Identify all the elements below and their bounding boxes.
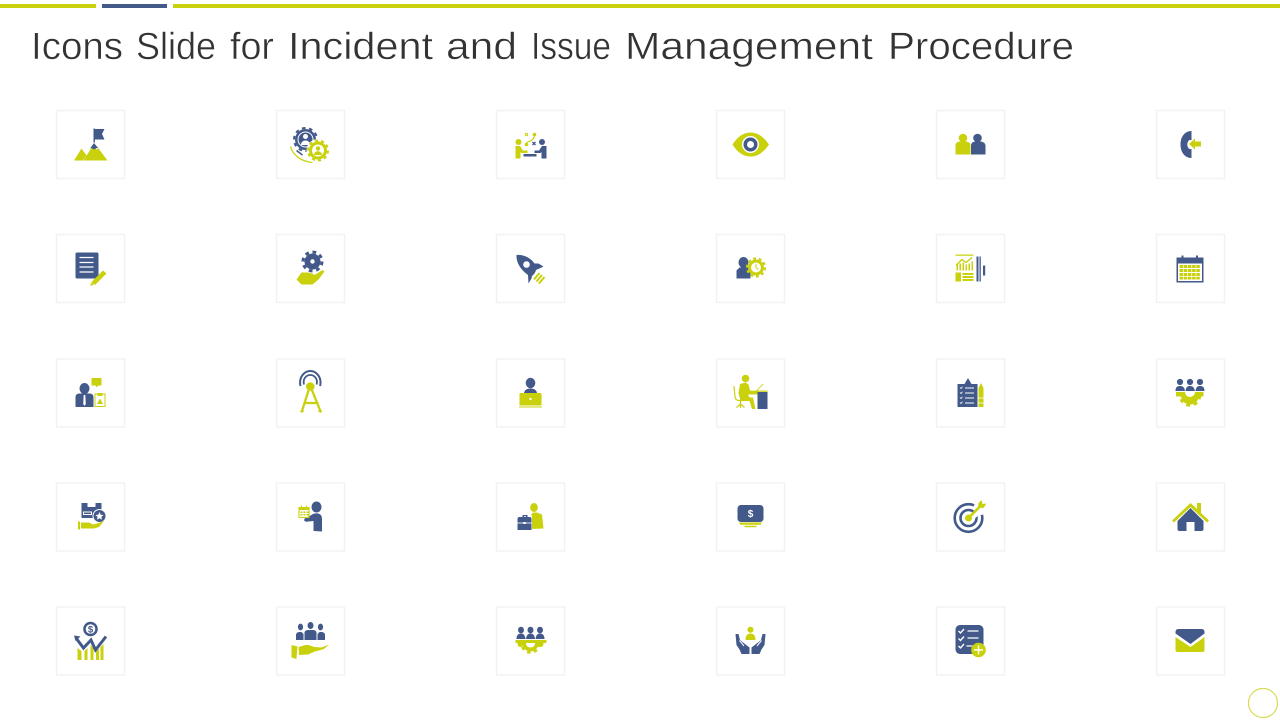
icon: document with pencil [76,252,106,286]
panel: card signal tower [276,359,344,427]
panel: card person speech clipboard [56,359,124,427]
title: Procedure [888,26,1074,68]
panel: card laptop person [496,359,564,427]
panel: card mountain flag [56,110,124,178]
icon: monitor with dollar: $ [748,509,754,520]
panel: card phone [1156,110,1224,178]
panel: card clipboard pencil [936,359,1004,427]
icon: hand holding gear [296,252,324,284]
title: for [230,26,274,68]
title: Incident [288,26,433,68]
panel: card calendar [1156,234,1224,302]
panel: card calendar person [276,483,344,551]
panel: card gears with people [276,110,344,178]
icon: two gears with people [290,128,330,162]
panel: card desk worker [716,359,784,427]
panel: card team hand [276,607,344,675]
icon: rocket [516,255,544,284]
panel: card dollar growth [56,607,124,675]
title: Icons [31,26,123,68]
panel: card dollar monitor [716,483,784,551]
top accent bars [0,4,1280,8]
icon: team on gear [1174,379,1206,406]
panel: card house [1156,483,1224,551]
icon: target with arrow [955,500,988,532]
panel: card box star hand [56,483,124,551]
icon: two people planning strategy [516,133,546,158]
icon: hand holding team [292,622,329,659]
panel: card document pencil [56,234,124,302]
icon: checklist with plus [956,625,986,657]
icon: mountain with flag [74,128,108,160]
icon: person with calendar [298,502,322,532]
icon: hand holding package with star [78,503,106,530]
icon: person with gear clock [736,257,765,278]
icon: dollar coin with growth chart: $ [88,624,94,636]
panel: card two people [936,110,1004,178]
icon: two people [956,134,986,154]
icon: person with speech bubble and clipboard [76,378,105,407]
panel: card gear on hand [276,234,344,302]
icon: signal tower [299,371,323,412]
panel: card team gear lime [496,607,564,675]
icon: team over gear [514,627,548,652]
panel: card hands person [716,607,784,675]
icon: eye [732,132,769,156]
panel: card envelope [1156,607,1224,675]
icon: envelope [1176,629,1204,652]
title: Issue [531,26,611,68]
panel: card team strategy [496,110,564,178]
panel: card team gear [1156,359,1224,427]
icon: house [1172,503,1209,531]
title [31,26,1074,68]
panel: card checklist add [936,607,1004,675]
panel: card eye [716,110,784,178]
panel: card rocket [496,234,564,302]
icon: person with laptop [519,378,542,408]
icon: checklist clipboard with pencil [958,378,984,407]
panel: card person gear clock [716,234,784,302]
corner circle [1248,688,1278,718]
icon: chart presentation board [956,254,985,282]
icon: calendar [1176,256,1204,282]
icon: person working at desk [734,375,768,409]
icon: hands protecting person [736,627,766,654]
panel: card briefcase person [496,483,564,551]
title: Management [625,26,873,68]
icon: person with briefcase [518,503,544,530]
title: Slide [136,26,216,68]
panel: card chart board [936,234,1004,302]
title: and [446,26,517,68]
icon: phone with arrow [1180,131,1201,158]
panel: card target [936,483,1004,551]
